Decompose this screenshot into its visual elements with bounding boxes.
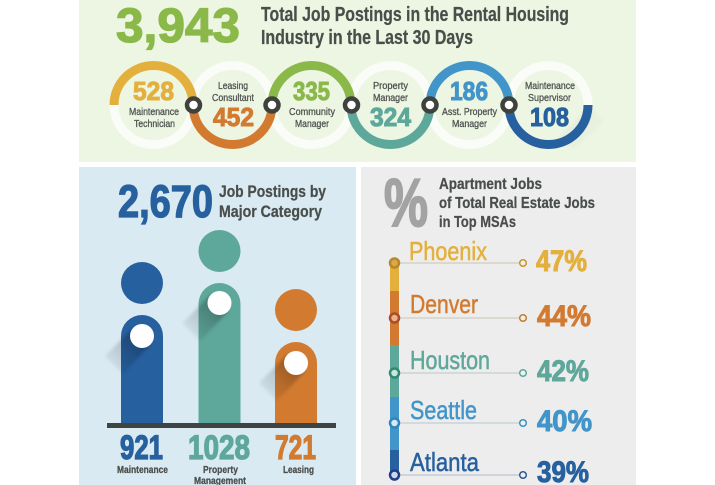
row: Houston: Houston	[410, 345, 490, 375]
value: leasing: 721	[275, 429, 316, 467]
role: maintenance technician: Technician	[134, 119, 175, 130]
heading: apartment jobs: Apartment Jobs	[439, 176, 542, 193]
value: leasing: Leasing	[283, 465, 314, 476]
bar: leasing	[259, 289, 317, 423]
row: Phoenix: Phoenix	[409, 236, 487, 266]
role: maintenance technician: Maintenance	[129, 107, 179, 118]
bar: property management	[182, 230, 240, 423]
panel: total job postings	[79, 0, 636, 162]
row: Denver: Denver	[410, 289, 478, 319]
role: community manager	[289, 76, 335, 130]
heading: total job postings: Industry in the Last 30 Days	[261, 27, 473, 49]
heading: total job postings	[261, 4, 569, 49]
role: maintenance supervisor: Maintenance	[525, 81, 575, 92]
row: Phoenix	[390, 236, 587, 278]
value: maintenance: Maintenance	[117, 465, 168, 476]
panel: job postings by major category	[79, 167, 356, 485]
total number 3,943: 3,943	[116, 0, 240, 53]
row: Seattle: 40%	[537, 405, 592, 438]
value: leasing	[275, 429, 316, 476]
row: Seattle: Seattle	[410, 395, 477, 425]
value: property management	[188, 429, 250, 485]
role: property manager: 324	[370, 102, 412, 132]
role: property manager: Property	[373, 81, 408, 92]
heading: apartment jobs: of Total Real Estate Jobs	[439, 195, 595, 212]
icon: percent sign: %	[384, 165, 428, 241]
heading: job postings by major category: Job Postings by	[219, 182, 326, 201]
role: assistant property manager: Asst. Property	[442, 107, 497, 118]
value: property management: 1028	[188, 429, 250, 467]
row: Denver	[390, 289, 591, 333]
role: community manager: 335	[293, 76, 330, 106]
row: Houston	[390, 345, 589, 388]
value: property management: Property	[203, 465, 238, 476]
role: maintenance technician	[129, 76, 179, 130]
role: leasing consultant: Consultant	[212, 93, 254, 104]
chart baseline	[107, 423, 336, 428]
heading: apartment jobs: in Top MSAs	[439, 214, 516, 231]
role: assistant property manager: 186	[450, 76, 488, 106]
chain of job role rings	[114, 66, 604, 150]
vertical timeline	[390, 260, 399, 478]
row: Atlanta	[390, 447, 589, 485]
category total 2,670: 2,670	[118, 176, 213, 227]
role: leasing consultant: 452	[213, 102, 254, 132]
row: Phoenix: 47%	[536, 245, 587, 278]
role: community manager: Manager	[295, 119, 330, 130]
role: assistant property manager	[442, 76, 497, 130]
heading: total job postings: Total Job Postings in the Rental Housing	[261, 4, 569, 26]
role: maintenance supervisor	[525, 81, 575, 132]
heading: apartment jobs	[439, 176, 595, 231]
row: Denver: 44%	[537, 300, 591, 333]
panel: apartment jobs share by MSA	[361, 165, 636, 485]
row: Houston: 42%	[537, 355, 589, 388]
heading: job postings by major category: Major Category	[219, 202, 322, 221]
bar: maintenance	[105, 262, 163, 423]
role: community manager: Community	[289, 107, 335, 118]
role: maintenance supervisor: 108	[530, 102, 569, 132]
heading: job postings by major category	[219, 182, 326, 221]
role: assistant property manager: Manager	[452, 119, 488, 130]
role: property manager	[370, 81, 412, 132]
row: Atlanta: Atlanta	[410, 447, 479, 477]
row: Seattle	[390, 395, 592, 438]
role: property manager: Manager	[373, 93, 409, 104]
role: leasing consultant: Leasing	[218, 81, 248, 92]
role: maintenance technician: 528	[133, 76, 174, 106]
value: maintenance	[117, 429, 168, 476]
value: maintenance: 921	[120, 429, 163, 467]
role: leasing consultant	[212, 81, 254, 132]
role: maintenance supervisor: Supervisor	[528, 93, 572, 104]
